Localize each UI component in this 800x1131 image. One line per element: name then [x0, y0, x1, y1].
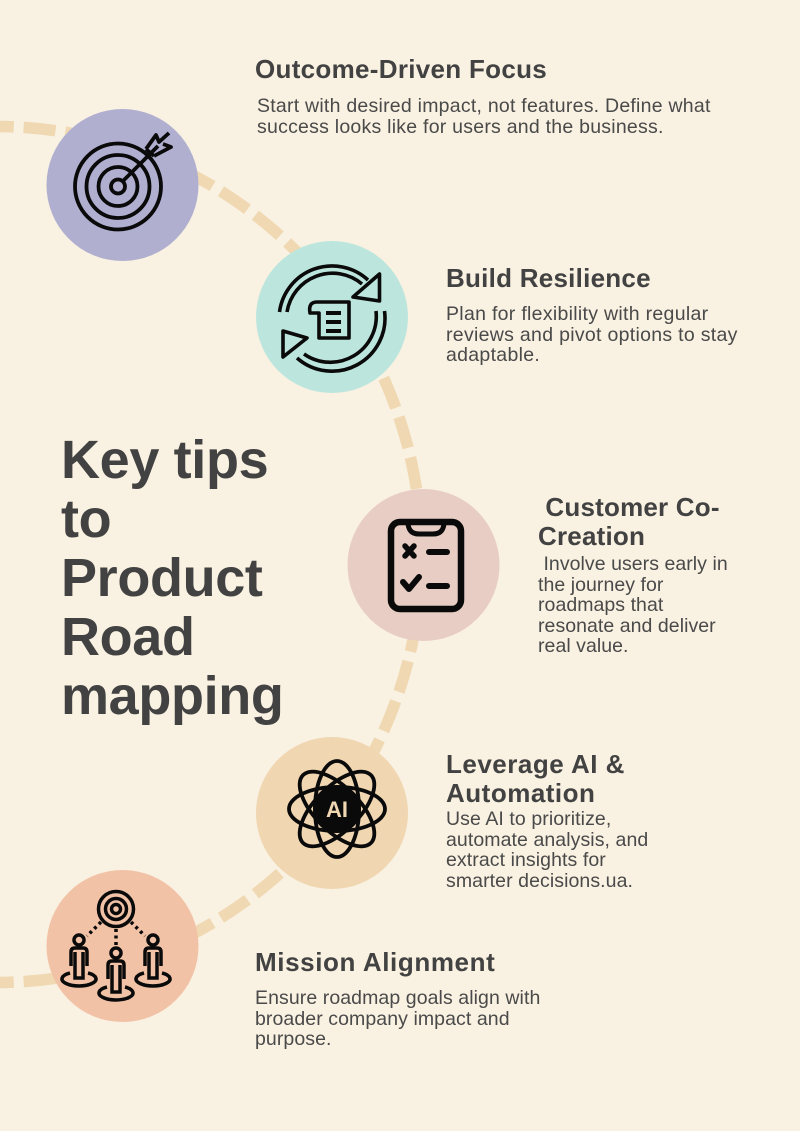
tip 5: Mission Alignment: purpose.: [255, 1028, 332, 1050]
tip 3: Customer Co-Creation: real value.: [538, 635, 629, 657]
icon: target in purple circle: [46, 109, 198, 261]
tip 3: Customer Co-Creation: resonate and deliver: [538, 614, 716, 636]
icon: AI atom in tan circle: [256, 737, 408, 889]
tip 4: Leverage AI & Automation: Leverage AI &: [446, 749, 625, 779]
tip 2: Build Resilience: Build Resilience: [446, 263, 651, 293]
tip 1: Outcome-Driven Focus: success looks like for users and the business.: [257, 116, 664, 138]
title: to: [61, 489, 111, 549]
tip 4: Leverage AI & Automation: Use AI to prioritize,: [446, 808, 611, 830]
tip 1: Outcome-Driven Focus: Start with desired impact, not features. Define what: [257, 95, 711, 117]
dashed curved path: [0, 126, 422, 982]
title: [61, 430, 284, 726]
tip 3: Customer Co-Creation: Involve users early in: [543, 553, 728, 575]
tip 5: Mission Alignment: broader company impact and: [255, 1008, 510, 1030]
tip 2: Build Resilience: [446, 263, 738, 366]
tip 5: Mission Alignment: Mission Alignment: [255, 947, 495, 977]
tip 4: Leverage AI & Automation: Automation: [446, 778, 595, 808]
tip 3: Customer Co-Creation: roadmaps that: [538, 594, 663, 616]
tip 3: Customer Co-Creation: the journey for: [538, 574, 663, 596]
icon: cycle document in teal circle: [256, 241, 408, 393]
icon: AI atom in tan circle: AI: [326, 797, 348, 822]
icon: people and target in orange circle: [46, 870, 198, 1022]
tip 3: Customer Co-Creation: Customer Co-: [545, 492, 720, 522]
tip 4: Leverage AI & Automation: extract insights for: [446, 849, 606, 871]
tip 4: Leverage AI & Automation: automate analysis, and: [446, 828, 648, 850]
icon: checklist in pink circle: [348, 489, 500, 641]
tip 5: Mission Alignment: [255, 947, 540, 1050]
title: Key tips: [61, 430, 268, 490]
tip 1: Outcome-Driven Focus: Outcome-Driven Focus: [255, 54, 547, 84]
tip 3: Customer Co-Creation: Creation: [538, 521, 645, 551]
tip 1: Outcome-Driven Focus: [255, 54, 711, 138]
tip 5: Mission Alignment: Ensure roadmap goals align with: [255, 987, 540, 1009]
tip 4: Leverage AI & Automation: [446, 749, 648, 892]
tip 3: Customer Co-Creation: [538, 492, 728, 657]
tip 4: Leverage AI & Automation: smarter decisions.ua.: [446, 870, 633, 892]
tip 2: Build Resilience: reviews and pivot options to stay: [446, 324, 738, 346]
tip 2: Build Resilience: Plan for flexibility with regular: [446, 303, 708, 325]
title: Product: [61, 548, 263, 608]
title: mapping: [61, 666, 284, 726]
title: Road: [61, 607, 195, 667]
tip 2: Build Resilience: adaptable.: [446, 344, 540, 366]
